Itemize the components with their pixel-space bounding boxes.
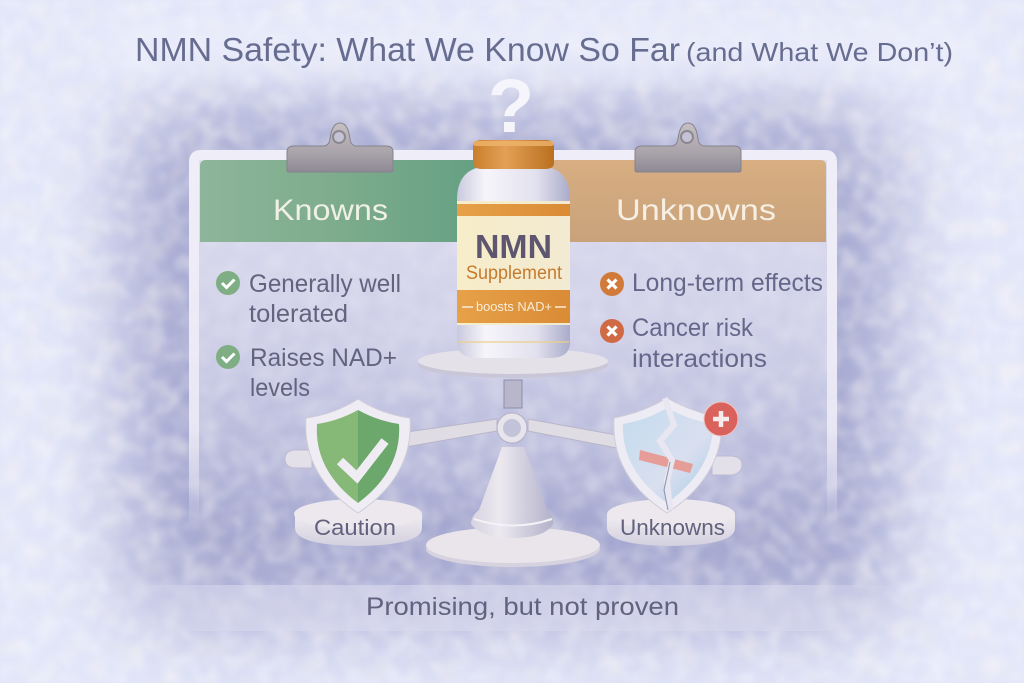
scale post (504, 380, 522, 408)
item: cancer risk interactions (600, 314, 767, 373)
title: (and What We Don’t) (686, 37, 953, 67)
bottle body (457, 167, 570, 358)
item: long-term effects: Long-term effects (632, 269, 823, 297)
item: cancer risk interactions: Cancer risk (632, 314, 753, 342)
scale base (426, 447, 600, 567)
scale (285, 380, 742, 567)
icon: red plus badge (704, 402, 738, 436)
scale beam (285, 419, 742, 475)
scale pivot (497, 413, 527, 443)
unknowns header: Unknowns (616, 194, 776, 227)
item: raises NAD+ levels: Raises NAD+ (250, 344, 397, 372)
title: NMN Safety: What We Know So Far (135, 31, 680, 68)
item: cancer risk interactions: interactions (632, 345, 767, 373)
item: generally well tolerated: Generally well (249, 270, 401, 298)
item: raises NAD+ levels: levels (250, 374, 310, 402)
pedestal: caution: Caution (314, 515, 396, 540)
platform (418, 348, 608, 378)
panel: unknowns (550, 160, 826, 373)
pedestal: unknowns (607, 499, 735, 546)
pedestal: caution (294, 499, 422, 546)
icon: left clip (287, 123, 393, 172)
footer caption: Promising, but not proven (366, 593, 679, 621)
icon: right clip (635, 123, 741, 172)
icon: cracked shield with plaster (614, 398, 722, 513)
footer band (105, 585, 920, 631)
item: generally well tolerated (216, 270, 401, 328)
bottle label (457, 201, 570, 342)
bottle cap (473, 140, 554, 169)
panel: knowns (200, 160, 480, 402)
icon: question mark: ? (488, 64, 534, 149)
knowns header (200, 160, 480, 242)
bottle label: NMN (475, 228, 552, 265)
knowns header: Knowns (273, 194, 388, 227)
bottle label: boosts NAD+ (476, 299, 552, 314)
bottle (457, 140, 570, 358)
clipboard panel (189, 150, 837, 525)
icon: green shield with check (306, 399, 410, 513)
bottle label: Supplement (466, 263, 563, 284)
item: generally well tolerated: tolerated (249, 300, 348, 328)
unknowns header (550, 160, 826, 242)
item: raises NAD+ levels (216, 344, 397, 402)
title (135, 31, 953, 68)
pedestal: unknowns: Unknowns (620, 515, 725, 540)
